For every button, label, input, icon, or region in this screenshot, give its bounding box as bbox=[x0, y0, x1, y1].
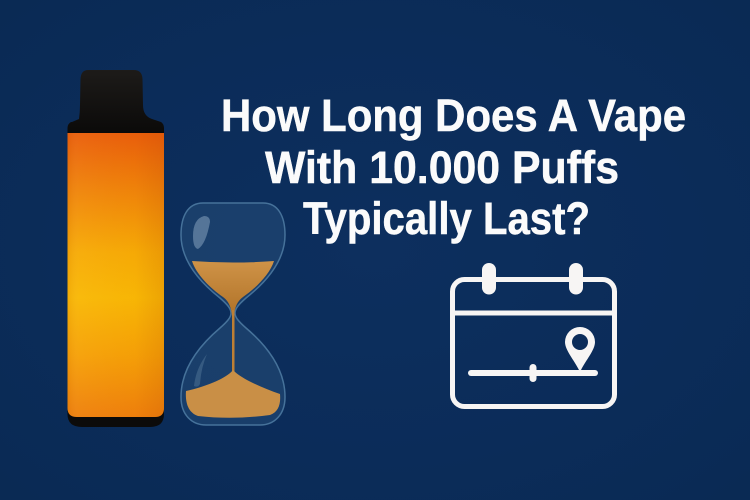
lower glass highlight bbox=[194, 354, 207, 387]
calendar header divider bbox=[452, 310, 615, 316]
top sand bbox=[192, 261, 274, 316]
title: With 10.000 Puffs bbox=[265, 142, 619, 193]
hourglass glass bbox=[181, 203, 285, 425]
title bbox=[221, 90, 686, 244]
hourglass bbox=[181, 203, 285, 425]
timeline slider bbox=[468, 364, 598, 382]
title: How Long Does A Vape bbox=[221, 90, 686, 141]
calendar binding rings bbox=[482, 263, 583, 294]
icon: calendar with timeline and pin bbox=[452, 263, 615, 406]
vape device bbox=[68, 70, 164, 427]
vape orange body bbox=[68, 133, 164, 417]
sand stream bbox=[232, 310, 234, 372]
vape bottom base bbox=[68, 410, 164, 427]
title: Typically Last? bbox=[303, 193, 590, 244]
location pin bbox=[565, 327, 595, 370]
glass highlight bbox=[193, 216, 210, 249]
vape mouthpiece cap bbox=[68, 70, 164, 133]
calendar frame bbox=[452, 280, 614, 406]
bottom sand bbox=[186, 370, 280, 418]
